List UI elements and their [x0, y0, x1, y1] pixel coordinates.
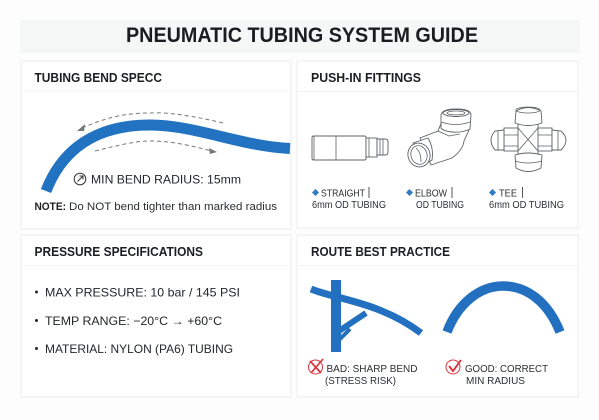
- title: [20, 20, 580, 53]
- title: PNEUMATIC TUBING SYSTEM GUIDE: [126, 24, 478, 47]
- label: bad: (STRESS RISK): [325, 375, 396, 387]
- icon: tee fitting: [491, 107, 566, 172]
- icon: straight fitting: [312, 136, 388, 160]
- label: bad: BAD: SHARP BEND: [326, 363, 418, 375]
- heading: route best practice: ROUTE BEST PRACTICE: [311, 245, 450, 259]
- arrow: upper dashed arc: [77, 113, 223, 131]
- panel: tubing bend spec: [21, 61, 291, 229]
- spec: max pressure: MAX PRESSURE: 10 bar / 145 PSI: [45, 286, 240, 300]
- label: tee: 6mm OD TUBING: [489, 199, 564, 211]
- spec: material: MATERIAL: NYLON (PA6) TUBING: [45, 342, 233, 356]
- label: straight: 6mm OD TUBING: [312, 199, 386, 211]
- label: straight: STRAIGHT: [321, 188, 365, 200]
- label: good: GOOD: CORRECT: [465, 363, 549, 375]
- note: NOTE:: [34, 201, 66, 213]
- min bend radius label: MIN BEND RADIUS: 15mm: [91, 172, 241, 186]
- icon: red check: [446, 360, 461, 374]
- tube: bend curve: [46, 125, 290, 191]
- panel: pressure specifications: [21, 235, 291, 397]
- panel: route best practice: [297, 235, 578, 397]
- label: good: [465, 363, 549, 387]
- label: bad: [325, 363, 418, 387]
- label: tee: TEE: [499, 188, 517, 200]
- icon: red cross: [308, 359, 323, 374]
- label: elbow: OD TUBING: [416, 199, 464, 211]
- heading: tubing bend spec: TUBING BEND SPECC: [34, 71, 162, 85]
- heading: push-in fittings: PUSH-IN FITTINGS: [311, 71, 421, 85]
- heading: pressure specifications: PRESSURE SPECIFICATIONS: [34, 245, 203, 259]
- panel: push-in fittings: [297, 61, 578, 228]
- icon: radius gauge: [74, 173, 86, 185]
- label: elbow: [406, 187, 464, 211]
- label: straight: [312, 187, 386, 211]
- tube: good correct radius: [447, 286, 560, 332]
- label: elbow: ELBOW: [415, 188, 447, 200]
- note: Do NOT bend tighter than marked radius: [69, 201, 278, 213]
- arrow: lower dashed arc: [95, 141, 217, 154]
- spec: temp range: TEMP RANGE: −20°C → +60°C: [45, 314, 222, 328]
- tube: bad sharp bend: [311, 280, 421, 352]
- label: good: MIN RADIUS: [466, 375, 525, 387]
- icon: elbow fitting: [405, 109, 471, 170]
- label: tee: [489, 187, 564, 211]
